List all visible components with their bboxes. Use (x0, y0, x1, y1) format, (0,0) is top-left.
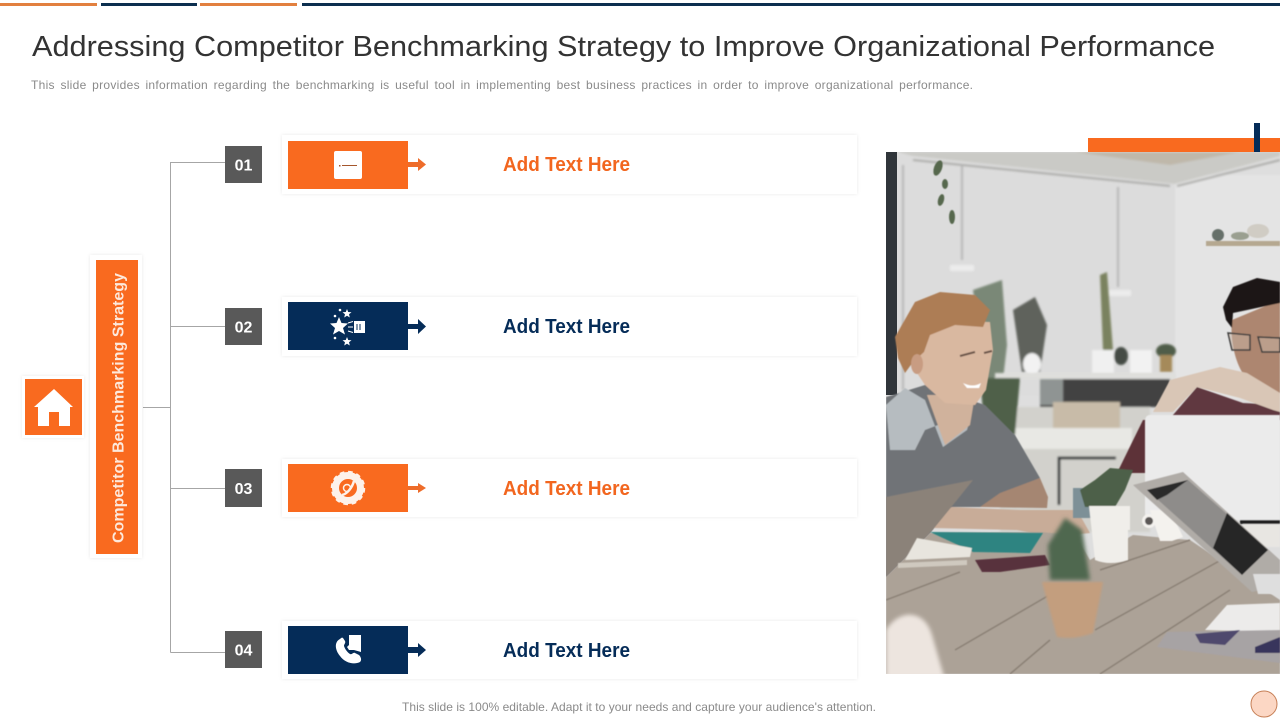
right man (1117, 278, 1280, 473)
left laptop (886, 480, 973, 577)
arrow 02 (408, 319, 426, 334)
foreground blurred shape (886, 615, 945, 680)
number badge 03: 03 (235, 481, 252, 498)
connector tree (143, 162, 225, 652)
wall shelf with pots (1206, 224, 1280, 246)
arrow 04 (408, 643, 426, 657)
page marker circle (1251, 691, 1277, 717)
number badge 04 (225, 631, 262, 668)
table (886, 532, 1280, 674)
number badge 03 (225, 469, 262, 507)
photo: team meeting around a table (886, 152, 1280, 680)
photo accent bars (1088, 123, 1280, 152)
icon tile 04 (288, 626, 408, 674)
top accent bars (0, 3, 1280, 6)
icon tile 03 (288, 464, 408, 512)
arrow 01 (408, 158, 426, 171)
title: Addressing Competitor Benchmarking Strategy to Improve Organizational Performance (32, 31, 1215, 63)
hanging plant (932, 159, 955, 224)
label 02: Add Text Here (503, 316, 630, 338)
plant and white pot (1073, 468, 1133, 563)
near laptop lid (1133, 472, 1280, 594)
foreground cactus pot (1042, 518, 1103, 638)
card 03 (282, 459, 857, 517)
card 04 (282, 621, 857, 679)
row 03 (225, 459, 857, 517)
card 01 (282, 135, 857, 194)
footer note: This slide is 100% editable. Adapt it to your needs and capture your audience's attention. (402, 700, 876, 714)
wall and ceiling (897, 152, 1280, 400)
home icon block (22, 376, 84, 438)
left man (886, 292, 1090, 577)
vertical label: Competitor Benchmarking Strategy (90, 255, 142, 558)
number badge 02 (225, 308, 262, 345)
number badge 01 (225, 146, 262, 183)
row 04 (225, 621, 857, 679)
number badge 01: 01 (235, 158, 252, 174)
arrow 03 (408, 483, 426, 493)
row 02 (225, 297, 857, 356)
white laptop (1145, 415, 1280, 547)
icon tile 01 (288, 141, 408, 189)
vertical label: Competitor Benchmarking Strategy: Competitor Benchmarking Strategy (110, 273, 128, 543)
card 02 (282, 297, 857, 356)
coffee cup (1144, 510, 1183, 541)
room shelf and lower background (980, 373, 1175, 532)
label 04: Add Text Here (503, 640, 630, 662)
number badge 02: 02 (235, 320, 252, 336)
magazine (1157, 603, 1280, 663)
books and phone (898, 532, 1050, 572)
label 01: Add Text Here (503, 154, 630, 176)
subtitle: This slide provides information regarding the benchmarking is useful tool in implementing best business practices in order to improve organizational performance. (31, 78, 973, 92)
label 03: Add Text Here (503, 478, 630, 500)
background plants and shelf objects (973, 272, 1176, 380)
icon tile 02 (288, 302, 408, 350)
number badge 04: 04 (235, 642, 252, 660)
icon: house (34, 389, 73, 426)
row 01 (225, 135, 857, 194)
